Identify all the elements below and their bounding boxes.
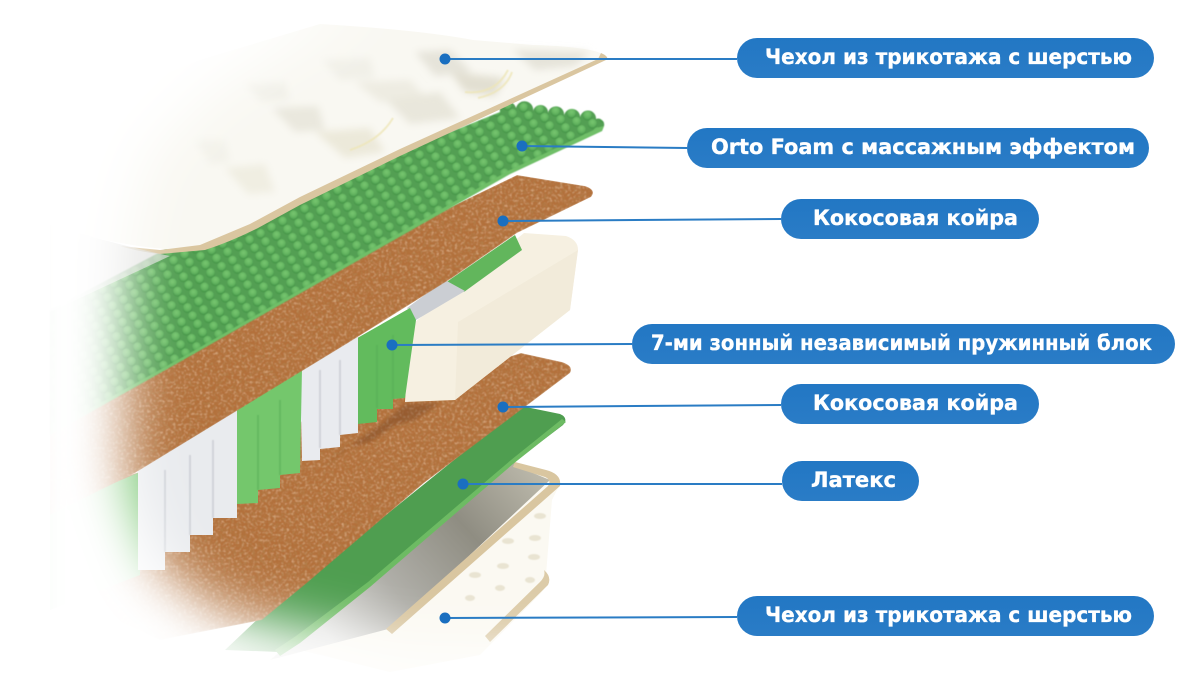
pill label: Чехол из трикотажа с шерстью (765, 45, 1132, 69)
pill label (782, 461, 919, 501)
layer: independent spring block (138, 235, 522, 570)
fade: white vignette over left and bottom (0, 0, 620, 700)
layer: upper coconut coir (50, 175, 593, 515)
pill label: Orto Foam с массажным эффектом (711, 135, 1135, 159)
pill label: Кокосовая койра (813, 206, 1018, 230)
mattress cutaway illustration (0, 0, 620, 700)
white springs rear (300, 332, 358, 461)
callout: coconut coir lower (498, 384, 1039, 424)
white springs front (138, 408, 237, 570)
cover edge band (120, 53, 607, 254)
layer: pale side shadow under top cover (50, 225, 170, 312)
layer: bottom knitted cover (270, 455, 560, 672)
callout: top cover (440, 38, 1154, 78)
leader line and dot (386, 340, 632, 350)
pill label: Чехол из трикотажа с шерстью (765, 603, 1132, 627)
leader line and dot (440, 612, 737, 624)
leader line and dot (516, 140, 687, 152)
pill label (687, 128, 1149, 168)
pill label (737, 596, 1154, 636)
pill label (632, 324, 1175, 364)
layer: latex (225, 406, 566, 656)
layer: orto foam with massage effect (50, 101, 604, 435)
callout: coconut coir upper (498, 199, 1039, 239)
far spring rows (345, 235, 522, 424)
pill label: Кокосовая койра (813, 391, 1018, 415)
callout: spring block (386, 324, 1175, 364)
layer: foam block (405, 233, 578, 402)
layer: top knitted cover (50, 24, 607, 254)
green springs middle (237, 368, 302, 504)
leader line and dot (458, 478, 782, 490)
layer: shadow under spring block (320, 403, 440, 470)
leader line and dot (498, 216, 781, 226)
callout: bottom cover (440, 596, 1154, 636)
spring seams (165, 360, 340, 552)
pill label (781, 384, 1039, 424)
leader line and dot (440, 54, 737, 64)
quilting tufts (195, 50, 590, 194)
pill label: Латекс (811, 468, 896, 492)
layer: pale green block behind springs (50, 472, 140, 610)
pill label: 7-ми зонный независимый пружинный блок (651, 331, 1152, 355)
callout: orto foam (516, 128, 1149, 168)
leader line and dot (498, 402, 781, 412)
pill label (737, 38, 1154, 78)
pill label (781, 199, 1039, 239)
layer: lower coconut coir (50, 353, 571, 640)
callout: latex (458, 461, 919, 501)
